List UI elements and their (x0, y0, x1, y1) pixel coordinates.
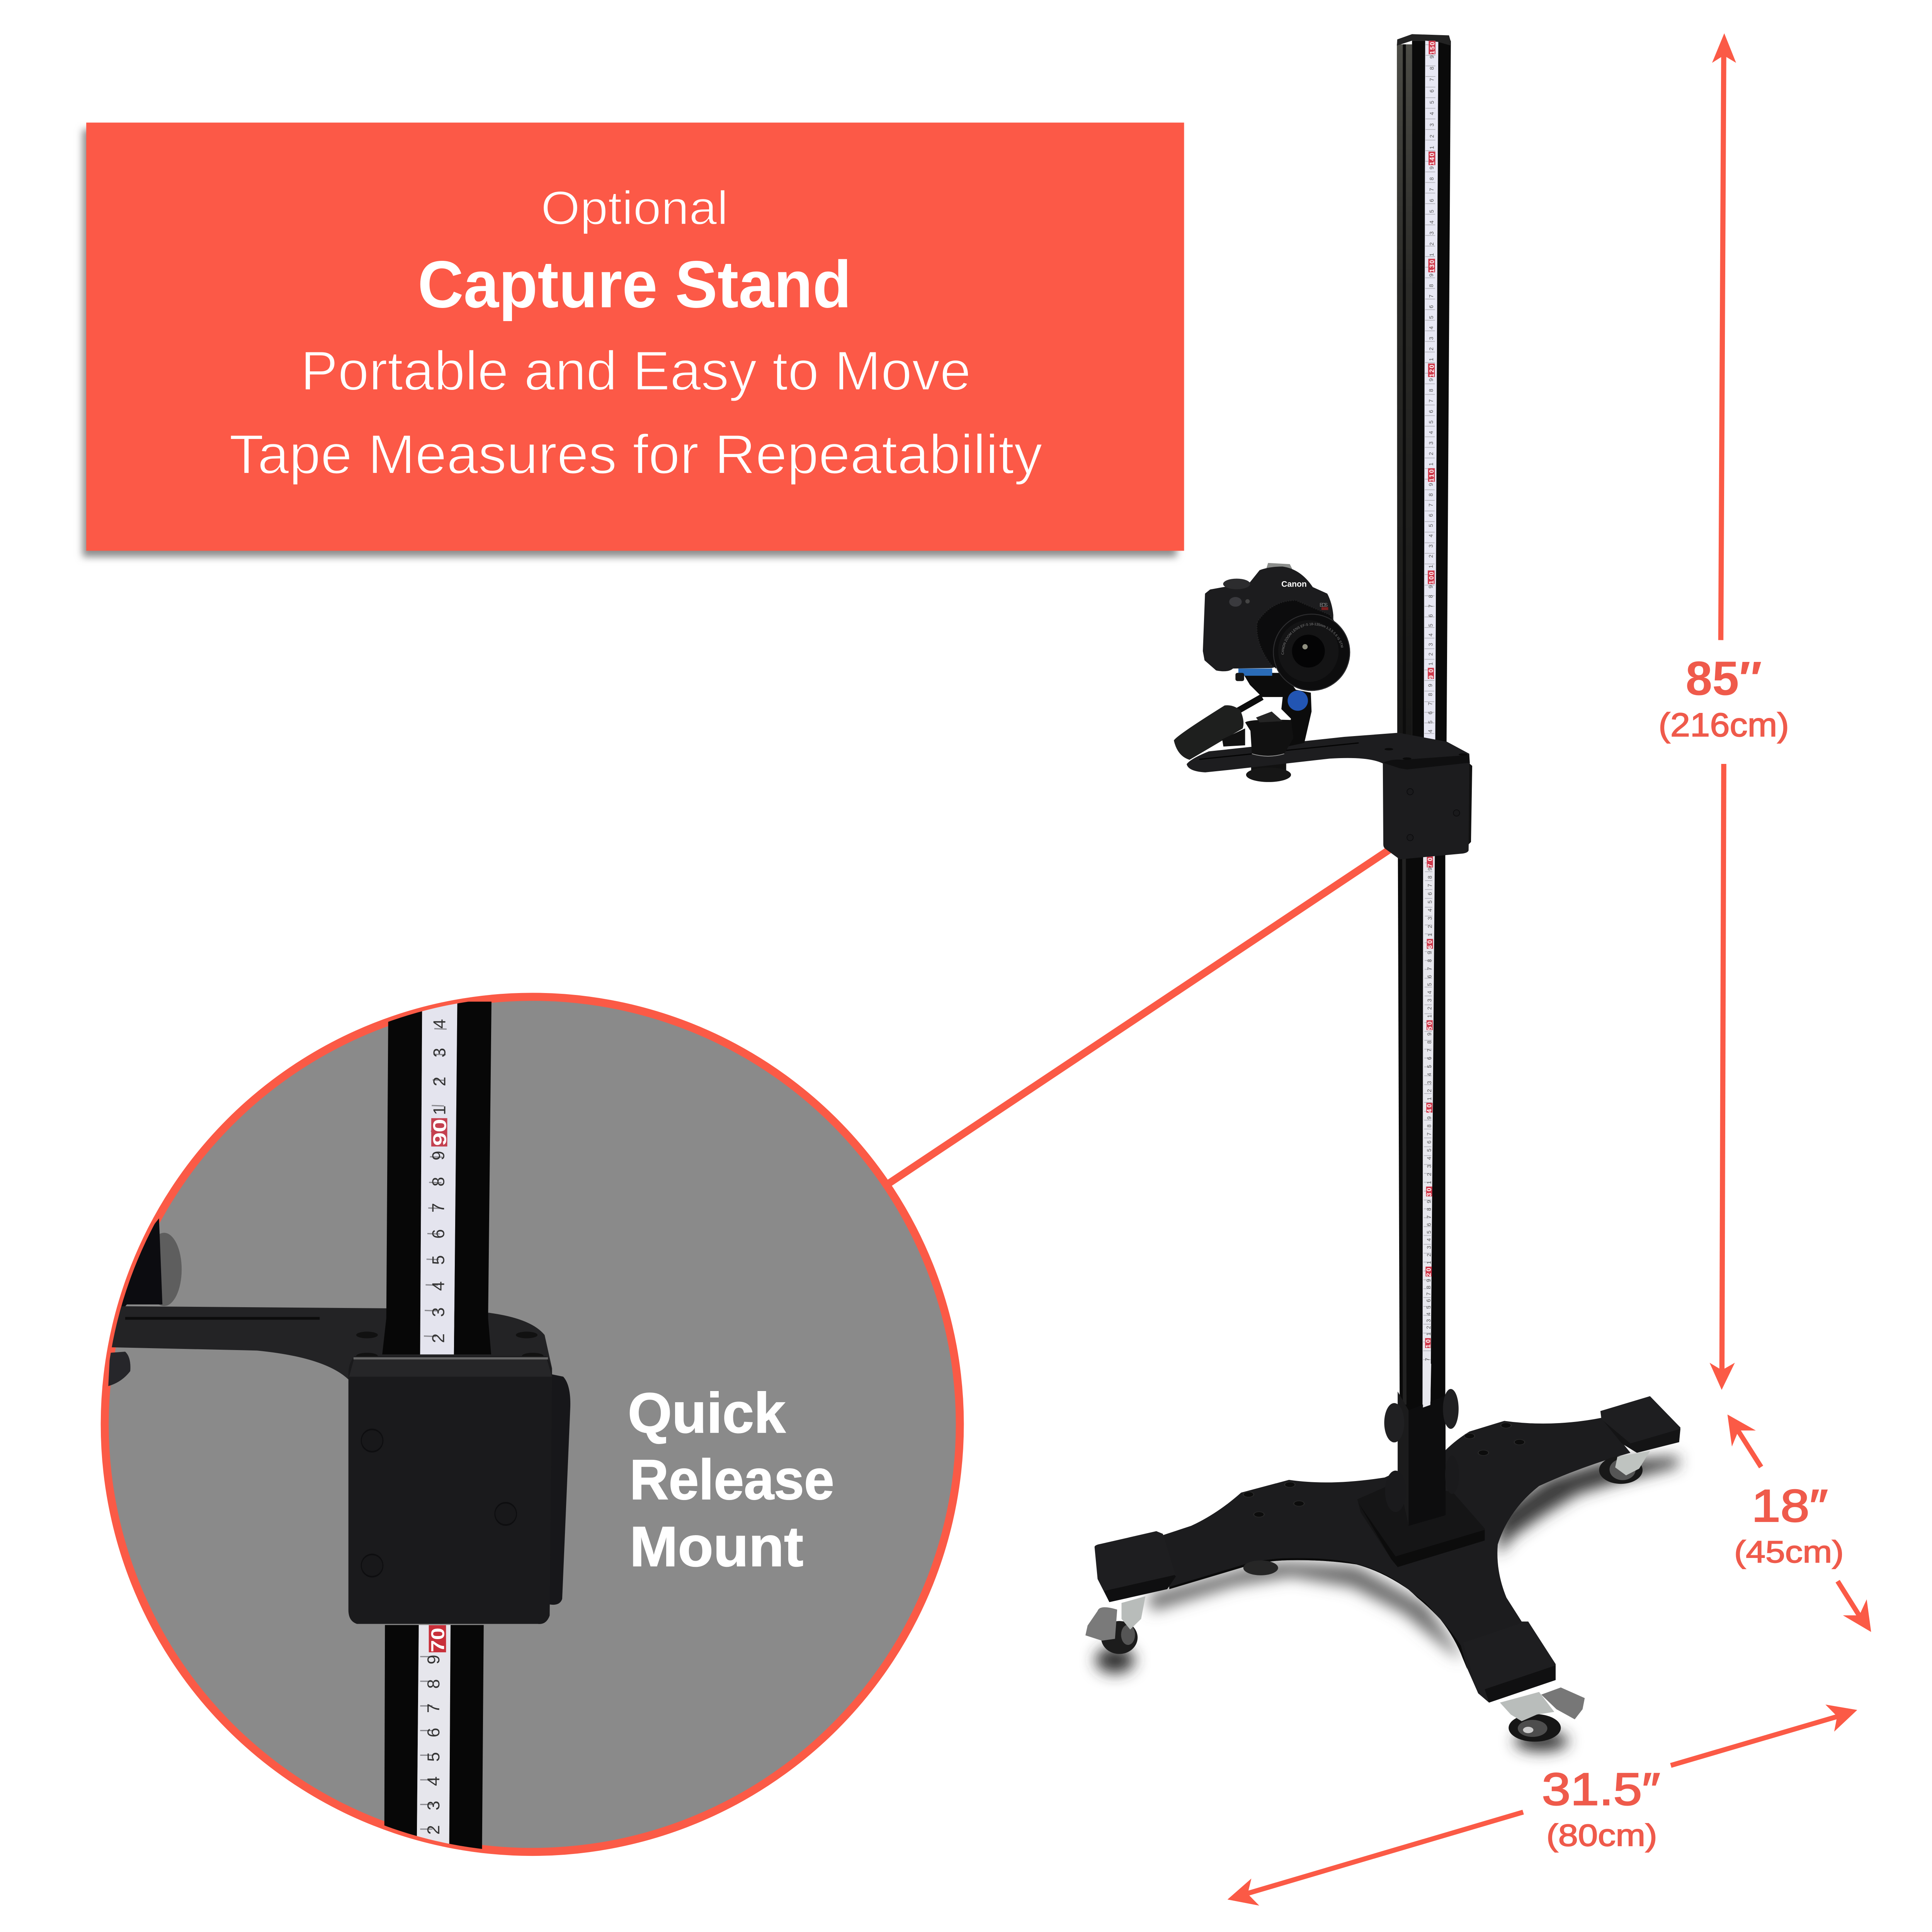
pan tilt head (1174, 668, 1311, 760)
tape digits: 1 2 3 4 5 6 7 8 9 (1426, 1116, 1432, 1184)
label: 31.5 inch width: 31.5″ (1542, 1764, 1660, 1815)
tape digits: 1 2 3 4 5 6 7 (1425, 1358, 1431, 1402)
text: optional: Optional (541, 182, 728, 235)
inset: upper tape digits continued: 1 2 3 4 (430, 1019, 449, 1115)
tape digits: 1 2 3 4 5 6 7 8 9 (1429, 55, 1435, 149)
tape red decade labels: 120 (1428, 365, 1435, 377)
base plate (1357, 1487, 1485, 1567)
tape digits: 1 2 3 4 5 6 7 8 9 (1427, 1032, 1433, 1100)
text: tape measures for repeatability: Tape Measures for Repeatability (229, 423, 1043, 485)
tape digits: 1 2 3 4 5 6 7 8 9 (1426, 1279, 1432, 1336)
inset label: quick: Quick (628, 1381, 786, 1445)
tape ticks (1427, 44, 1430, 1402)
right pad (1600, 1396, 1680, 1453)
tape red decade labels: 20 (1425, 1268, 1432, 1277)
tape digits: 1 2 3 4 5 6 7 8 9 (1427, 867, 1433, 936)
inset: lower tape digits: 2 3 4 5 6 7 8 9 (424, 1655, 443, 1835)
arrow: height lower (1709, 764, 1735, 1390)
panel: quick release mount inset (105, 997, 960, 1852)
inset label: release: Release (629, 1448, 834, 1512)
collar, knobs and base (1095, 1364, 1680, 1702)
camera: EOS (1320, 602, 1328, 608)
arrow: width left (1228, 1812, 1523, 1906)
tape red decade labels: 60 (1426, 940, 1434, 949)
tape red decade labels: 50 (1426, 1021, 1433, 1030)
label: 85 inch height: 85″ (1685, 651, 1762, 705)
tape red decade labels: 100 (1428, 572, 1435, 584)
camera plate and mount block (1187, 733, 1472, 859)
left pad (1095, 1531, 1176, 1602)
label: 45 cm: (45cm) (1734, 1534, 1844, 1569)
inset: camera knob remnant (108, 1218, 182, 1386)
rear middle caster (1243, 1560, 1278, 1575)
inset: red ninety label: 90 (430, 1119, 450, 1146)
column (1398, 1392, 1446, 1526)
tape red decade labels: 30 (1425, 1188, 1433, 1196)
tape red decade labels: 110 (1428, 469, 1435, 482)
tape digits: 1 2 3 4 5 6 7 8 9 (1428, 585, 1434, 665)
inset: lower tape ticks (424, 1651, 428, 1830)
inset: upper pole (382, 1002, 492, 1354)
callout connector line (889, 848, 1392, 1183)
tape digits: 1 2 3 4 5 6 7 8 9 (1428, 483, 1434, 568)
bottom pad (1463, 1622, 1556, 1702)
inset: upper tape digits: 2 3 4 5 6 7 8 9 (429, 1151, 448, 1343)
tape red decade labels: 40 (1426, 1104, 1433, 1112)
tape digits: 1 2 3 4 5 6 7 8 9 (1429, 378, 1435, 466)
arrow: depth upper (1728, 1415, 1761, 1467)
tape red decade labels (1425, 41, 1436, 1348)
tape red decade labels: 140 (1429, 153, 1436, 165)
arrow: height upper (1712, 33, 1736, 640)
inset: mounting plate (108, 1306, 552, 1379)
panel: title banner (83, 122, 1184, 557)
inset: upper tape ticks (430, 1010, 441, 1337)
main photo: capture stand (1085, 34, 1680, 1742)
arrow: depth lower (1838, 1581, 1871, 1632)
inset: lower pole (384, 1625, 484, 1852)
arm edge shading (1169, 1558, 1467, 1669)
tape red decade labels: 150 (1429, 42, 1436, 54)
pole (1397, 34, 1451, 1417)
left caster (1101, 1621, 1138, 1654)
tape digits: 1 2 3 4 5 6 7 8 9 (1427, 951, 1433, 1018)
rear right caster (1599, 1456, 1643, 1484)
mounting holes (1243, 1423, 1525, 1517)
camera: CANON ZOOM LENS EF-S 18-135mm 1:3.5-5.6 IS STM (1281, 622, 1344, 655)
inset: mount block (349, 1356, 570, 1624)
text: portable and easy to move: Portable and Easy to Move (301, 340, 971, 402)
tape red decade labels: 70 (1427, 857, 1434, 867)
tape red decade labels: 10 (1425, 1339, 1432, 1348)
tape digits: 1 2 3 4 5 6 7 8 9 (1429, 274, 1435, 361)
tape red decade labels: 90 (1427, 669, 1435, 679)
bottom caster (1509, 1714, 1561, 1742)
tape red decade labels: 130 (1428, 260, 1435, 272)
arrow: width right (1671, 1704, 1857, 1765)
tape digits: 1 2 3 4 5 6 7 8 9 (1429, 166, 1435, 256)
inset: red seventy label: 70 (428, 1628, 449, 1652)
label: 18 inch depth: 18″ (1752, 1481, 1828, 1532)
tape digits: 1 2 3 4 5 6 7 8 9 (1428, 684, 1434, 760)
tape digits (1425, 55, 1435, 1402)
heading: capture stand: Capture Stand (418, 247, 851, 321)
casters (1085, 1451, 1650, 1742)
label: 216 cm: (216cm) (1658, 706, 1789, 743)
camera (1203, 563, 1350, 690)
inset label: mount: Mount (629, 1515, 803, 1578)
camera: Canon (1281, 580, 1307, 589)
knobs (1384, 1403, 1404, 1442)
base body (1163, 1418, 1630, 1702)
floor shadows under base (1095, 1457, 1678, 1751)
label: 80 cm: (80cm) (1546, 1818, 1657, 1852)
tape digits: 1 2 3 4 5 6 7 8 9 (1426, 1200, 1432, 1264)
